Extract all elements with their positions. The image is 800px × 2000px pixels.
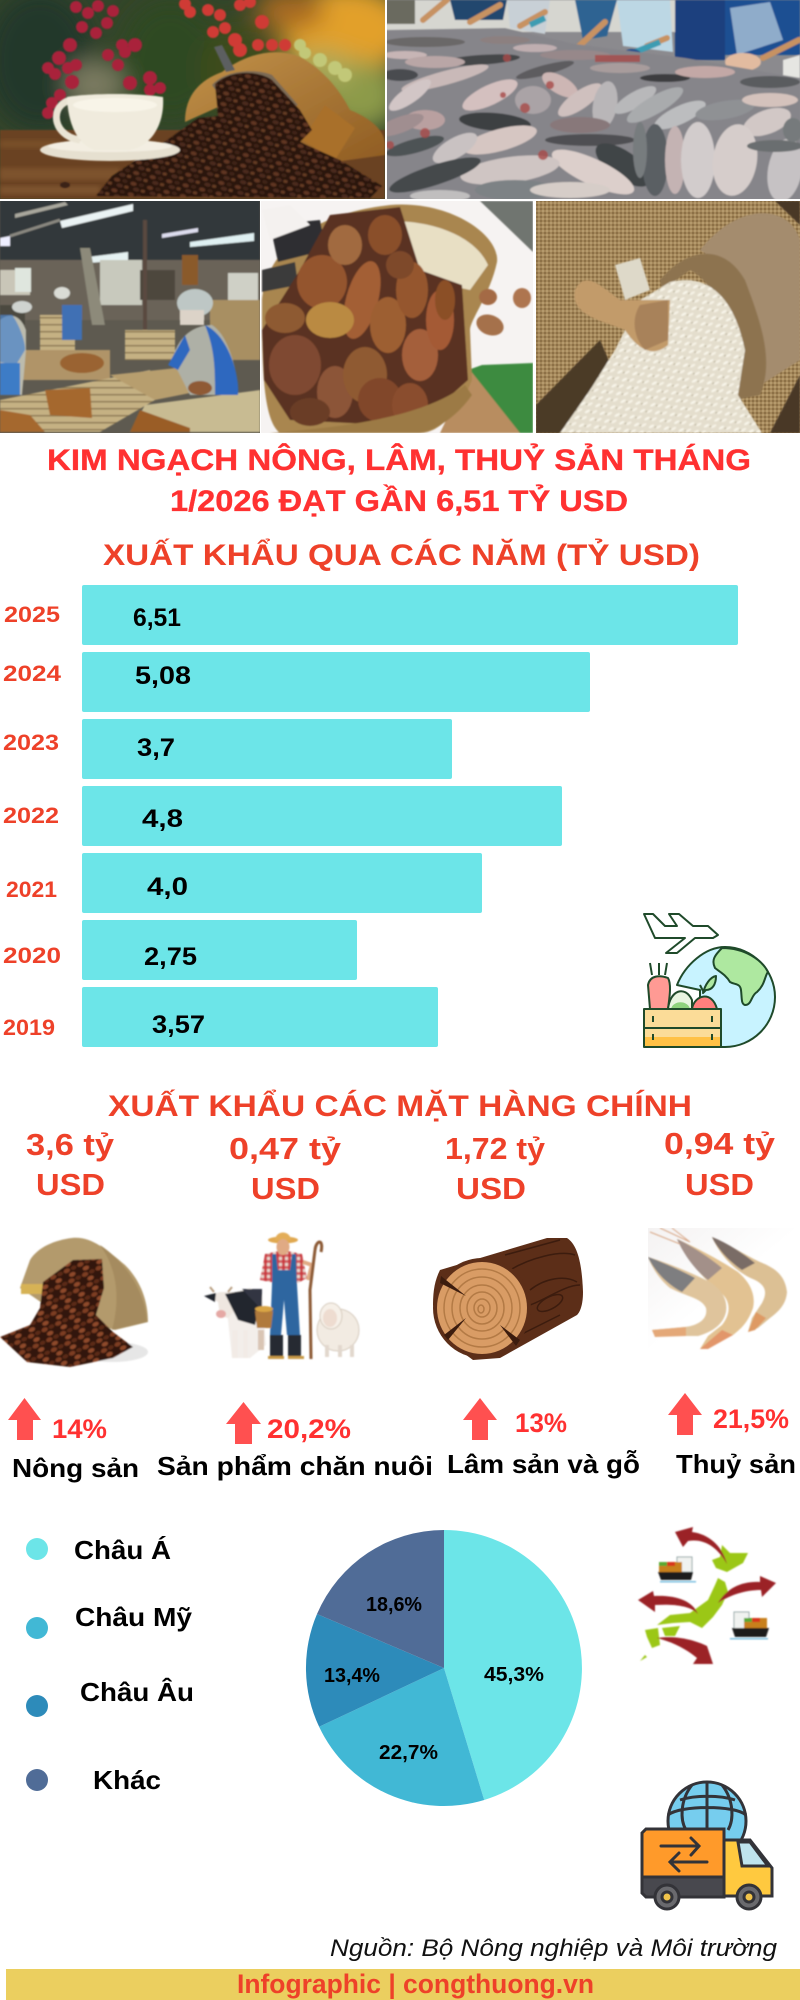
bar chart: exports by year	[3, 585, 738, 1047]
ship right	[730, 1612, 769, 1640]
bar: 2019	[3, 987, 438, 1047]
growth percentages	[52, 1404, 789, 1444]
image: coffee sack	[0, 1238, 148, 1367]
photo: fish processing line	[374, 0, 800, 204]
pie chart: export markets: 22,7%	[379, 1742, 438, 1764]
bar: 2022: 2022	[3, 803, 59, 828]
growth percentages: 20,2%	[267, 1414, 351, 1444]
bar: 2021	[6, 853, 482, 913]
ship left	[658, 1557, 696, 1582]
values: export amounts: USD	[251, 1171, 320, 1206]
photo: rice in burlap sack	[536, 201, 800, 433]
bar: 2025: 2025	[4, 602, 60, 627]
photo: cashew nuts in basket	[261, 201, 533, 433]
photo: wood factory	[0, 200, 260, 433]
growth percentages: 21,5%	[713, 1404, 789, 1434]
bar: 2024	[3, 652, 590, 712]
pie chart: export markets: 18,6%	[366, 1594, 422, 1616]
title: 1/2026 ĐẠT GẦN 6,51 TỶ USD	[170, 484, 628, 518]
legend: markets	[26, 1535, 194, 1795]
bar: 2022: 4,8	[142, 805, 183, 833]
legend: markets: Châu Á	[74, 1535, 171, 1565]
photo: coffee cup and beans	[0, 0, 410, 199]
cow	[204, 1287, 266, 1358]
category labels	[12, 1449, 796, 1483]
image: farmer with cow and sheep	[204, 1232, 359, 1359]
icon: delivery truck and globe	[642, 1782, 772, 1909]
image: shrimp	[648, 1228, 800, 1352]
title: KIM NGẠCH NÔNG, LÂM, THUỶ SẢN THÁNG	[47, 443, 751, 477]
sheep	[317, 1303, 359, 1357]
icon: plane, globe and produce crate	[644, 914, 775, 1047]
values: export amounts: 0,47 tỷ	[229, 1131, 342, 1166]
pie chart: export markets: 13,4%	[324, 1665, 380, 1687]
category labels: Lâm sản và gỗ	[447, 1449, 640, 1479]
image: wooden log	[433, 1238, 583, 1360]
growth percentages: 14%	[52, 1414, 107, 1444]
values: export amounts: 1,72 tỷ	[445, 1131, 546, 1166]
values: export amounts: USD	[36, 1167, 105, 1202]
title	[47, 443, 751, 518]
bar: 2019: 2019	[3, 1015, 55, 1040]
category labels: Sản phẩm chăn nuôi	[157, 1451, 433, 1481]
bar: 2025: 6,51	[133, 604, 181, 632]
icon: Japan map with export arrows and ships	[638, 1527, 776, 1664]
bar: 2021: 4,0	[147, 873, 188, 901]
bar: 2023: 2023	[3, 730, 59, 755]
bar: 2019: 3,57	[152, 1011, 205, 1039]
bar: 2020	[3, 920, 357, 980]
bar: 2023	[3, 719, 452, 779]
values: export amounts: 3,6 tỷ	[26, 1127, 115, 1162]
footer band	[6, 1969, 800, 2000]
bar: 2021: 2021	[6, 877, 57, 902]
legend: markets: Khác	[93, 1765, 161, 1795]
source note: Nguồn: Bộ Nông nghiệp và Môi trường	[330, 1935, 778, 1962]
category labels: Nông sản	[12, 1453, 139, 1483]
footer band: Infographic | congthuong.vn	[237, 1969, 594, 1999]
heading: exports by year: XUẤT KHẨU QUA CÁC NĂM (TỶ USD)	[103, 538, 700, 572]
bar: 2020: 2,75	[144, 943, 197, 971]
legend: markets: Châu Âu	[80, 1677, 194, 1707]
arrow: up Nông sản	[8, 1398, 41, 1440]
bar: 2020: 2020	[3, 943, 61, 968]
arrow: up Thuỷ sản	[668, 1393, 702, 1435]
bar: 2024: 2024	[3, 661, 62, 686]
values: export amounts	[26, 1126, 776, 1206]
values: export amounts: USD	[685, 1167, 754, 1202]
arrow: up Sản phẩm chăn nuôi	[226, 1402, 261, 1444]
bar: 2022	[3, 786, 562, 846]
pie chart: export markets: 45,3%	[484, 1664, 544, 1686]
values: export amounts: 0,94 tỷ	[664, 1126, 776, 1161]
category labels: Thuỷ sản	[676, 1449, 796, 1479]
legend: markets: Châu Mỹ	[75, 1602, 193, 1632]
bar: 2024: 5,08	[135, 662, 191, 690]
farmer	[255, 1232, 322, 1359]
bar: 2025	[4, 585, 738, 645]
values: export amounts: USD	[456, 1171, 526, 1206]
pie chart: export markets	[306, 1530, 582, 1806]
heading: main export goods: XUẤT KHẨU CÁC MẶT HÀNG CHÍNH	[108, 1089, 692, 1123]
arrow: up Lâm sản và gỗ	[463, 1398, 497, 1440]
bar: 2023: 3,7	[137, 734, 175, 762]
growth percentages: 13%	[515, 1408, 567, 1438]
